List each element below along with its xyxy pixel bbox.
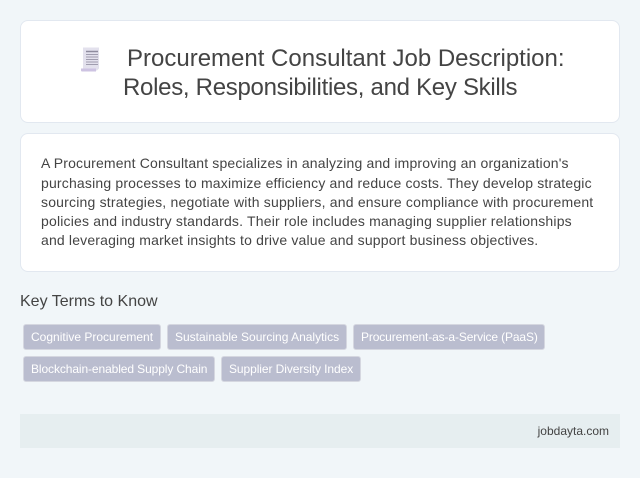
description text: sourcing strategies, negotiate with suppliers, and ensure compliance with procurement xyxy=(41,194,593,210)
panel: title card xyxy=(20,20,620,123)
description text: A Procurement Consultant specializes in analyzing and improving an organization's xyxy=(41,155,569,171)
icon: document receipt xyxy=(81,48,99,72)
description text xyxy=(41,155,594,248)
tag: supplier diversity index: Supplier Diversity Index xyxy=(229,362,353,376)
tag: cognitive procurement xyxy=(23,324,161,350)
title line 1: Procurement Consultant Job Description: xyxy=(127,45,565,72)
tag: sustainable sourcing analytics: Sustainable Sourcing Analytics xyxy=(175,330,339,344)
heading: key terms: Key Terms to Know xyxy=(20,293,158,310)
tag: blockchain supply chain: Blockchain-enabled Supply Chain xyxy=(31,362,207,376)
title line 2: Roles, Responsibilities, and Key Skills xyxy=(123,74,517,101)
tag list xyxy=(23,324,545,382)
panel: description card xyxy=(20,133,620,272)
tag: procurement as a service xyxy=(353,324,545,350)
footer source text: jobdayta.com xyxy=(538,424,609,438)
tag: sustainable sourcing analytics xyxy=(167,324,347,350)
tag: procurement as a service: Procurement-as-a-Service (PaaS) xyxy=(361,330,538,344)
tag: supplier diversity index xyxy=(221,356,361,382)
tag: blockchain supply chain xyxy=(23,356,215,382)
description text: purchasing processes to maximize efficiency and reduce costs. They develop strategic xyxy=(41,175,592,191)
description text: and leveraging market insights to drive value and support business objectives. xyxy=(41,232,538,248)
footer bar xyxy=(20,414,620,448)
tag: cognitive procurement: Cognitive Procurement xyxy=(31,330,153,344)
description text: policies and industry standards. Their role includes managing supplier relationships xyxy=(41,213,572,229)
